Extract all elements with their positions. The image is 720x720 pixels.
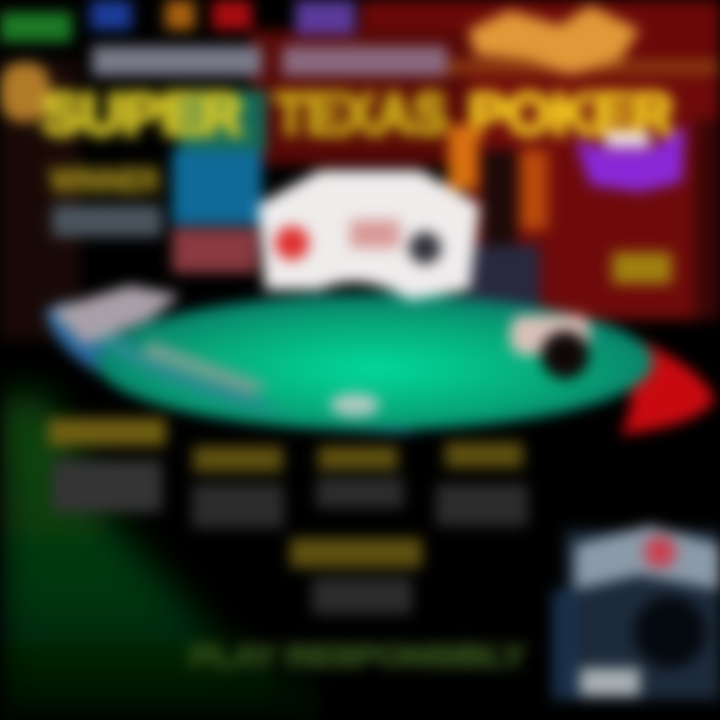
flame columns	[448, 125, 548, 250]
feature: five	[290, 538, 422, 614]
title: POKER	[468, 82, 673, 147]
purple badge	[575, 125, 685, 192]
title: TEXAS	[275, 82, 447, 147]
feature: two	[192, 446, 284, 528]
title	[42, 82, 673, 147]
table cards and chips	[50, 285, 590, 417]
left text block	[50, 162, 162, 237]
feature: three	[316, 446, 404, 508]
poker table	[45, 294, 715, 435]
teal and blue panel	[172, 90, 266, 273]
title banners	[92, 46, 447, 76]
gold label	[612, 252, 672, 284]
top decorations	[0, 0, 640, 122]
feature: four	[436, 442, 528, 526]
title: SUPER	[42, 82, 242, 147]
poker chips image	[552, 525, 720, 700]
playing cards	[258, 170, 480, 300]
right dark figure	[470, 245, 540, 310]
footer text: PLAY RESPONSIBLY	[190, 640, 525, 673]
left text block: WINNER	[50, 162, 160, 200]
feature: one	[48, 418, 166, 512]
